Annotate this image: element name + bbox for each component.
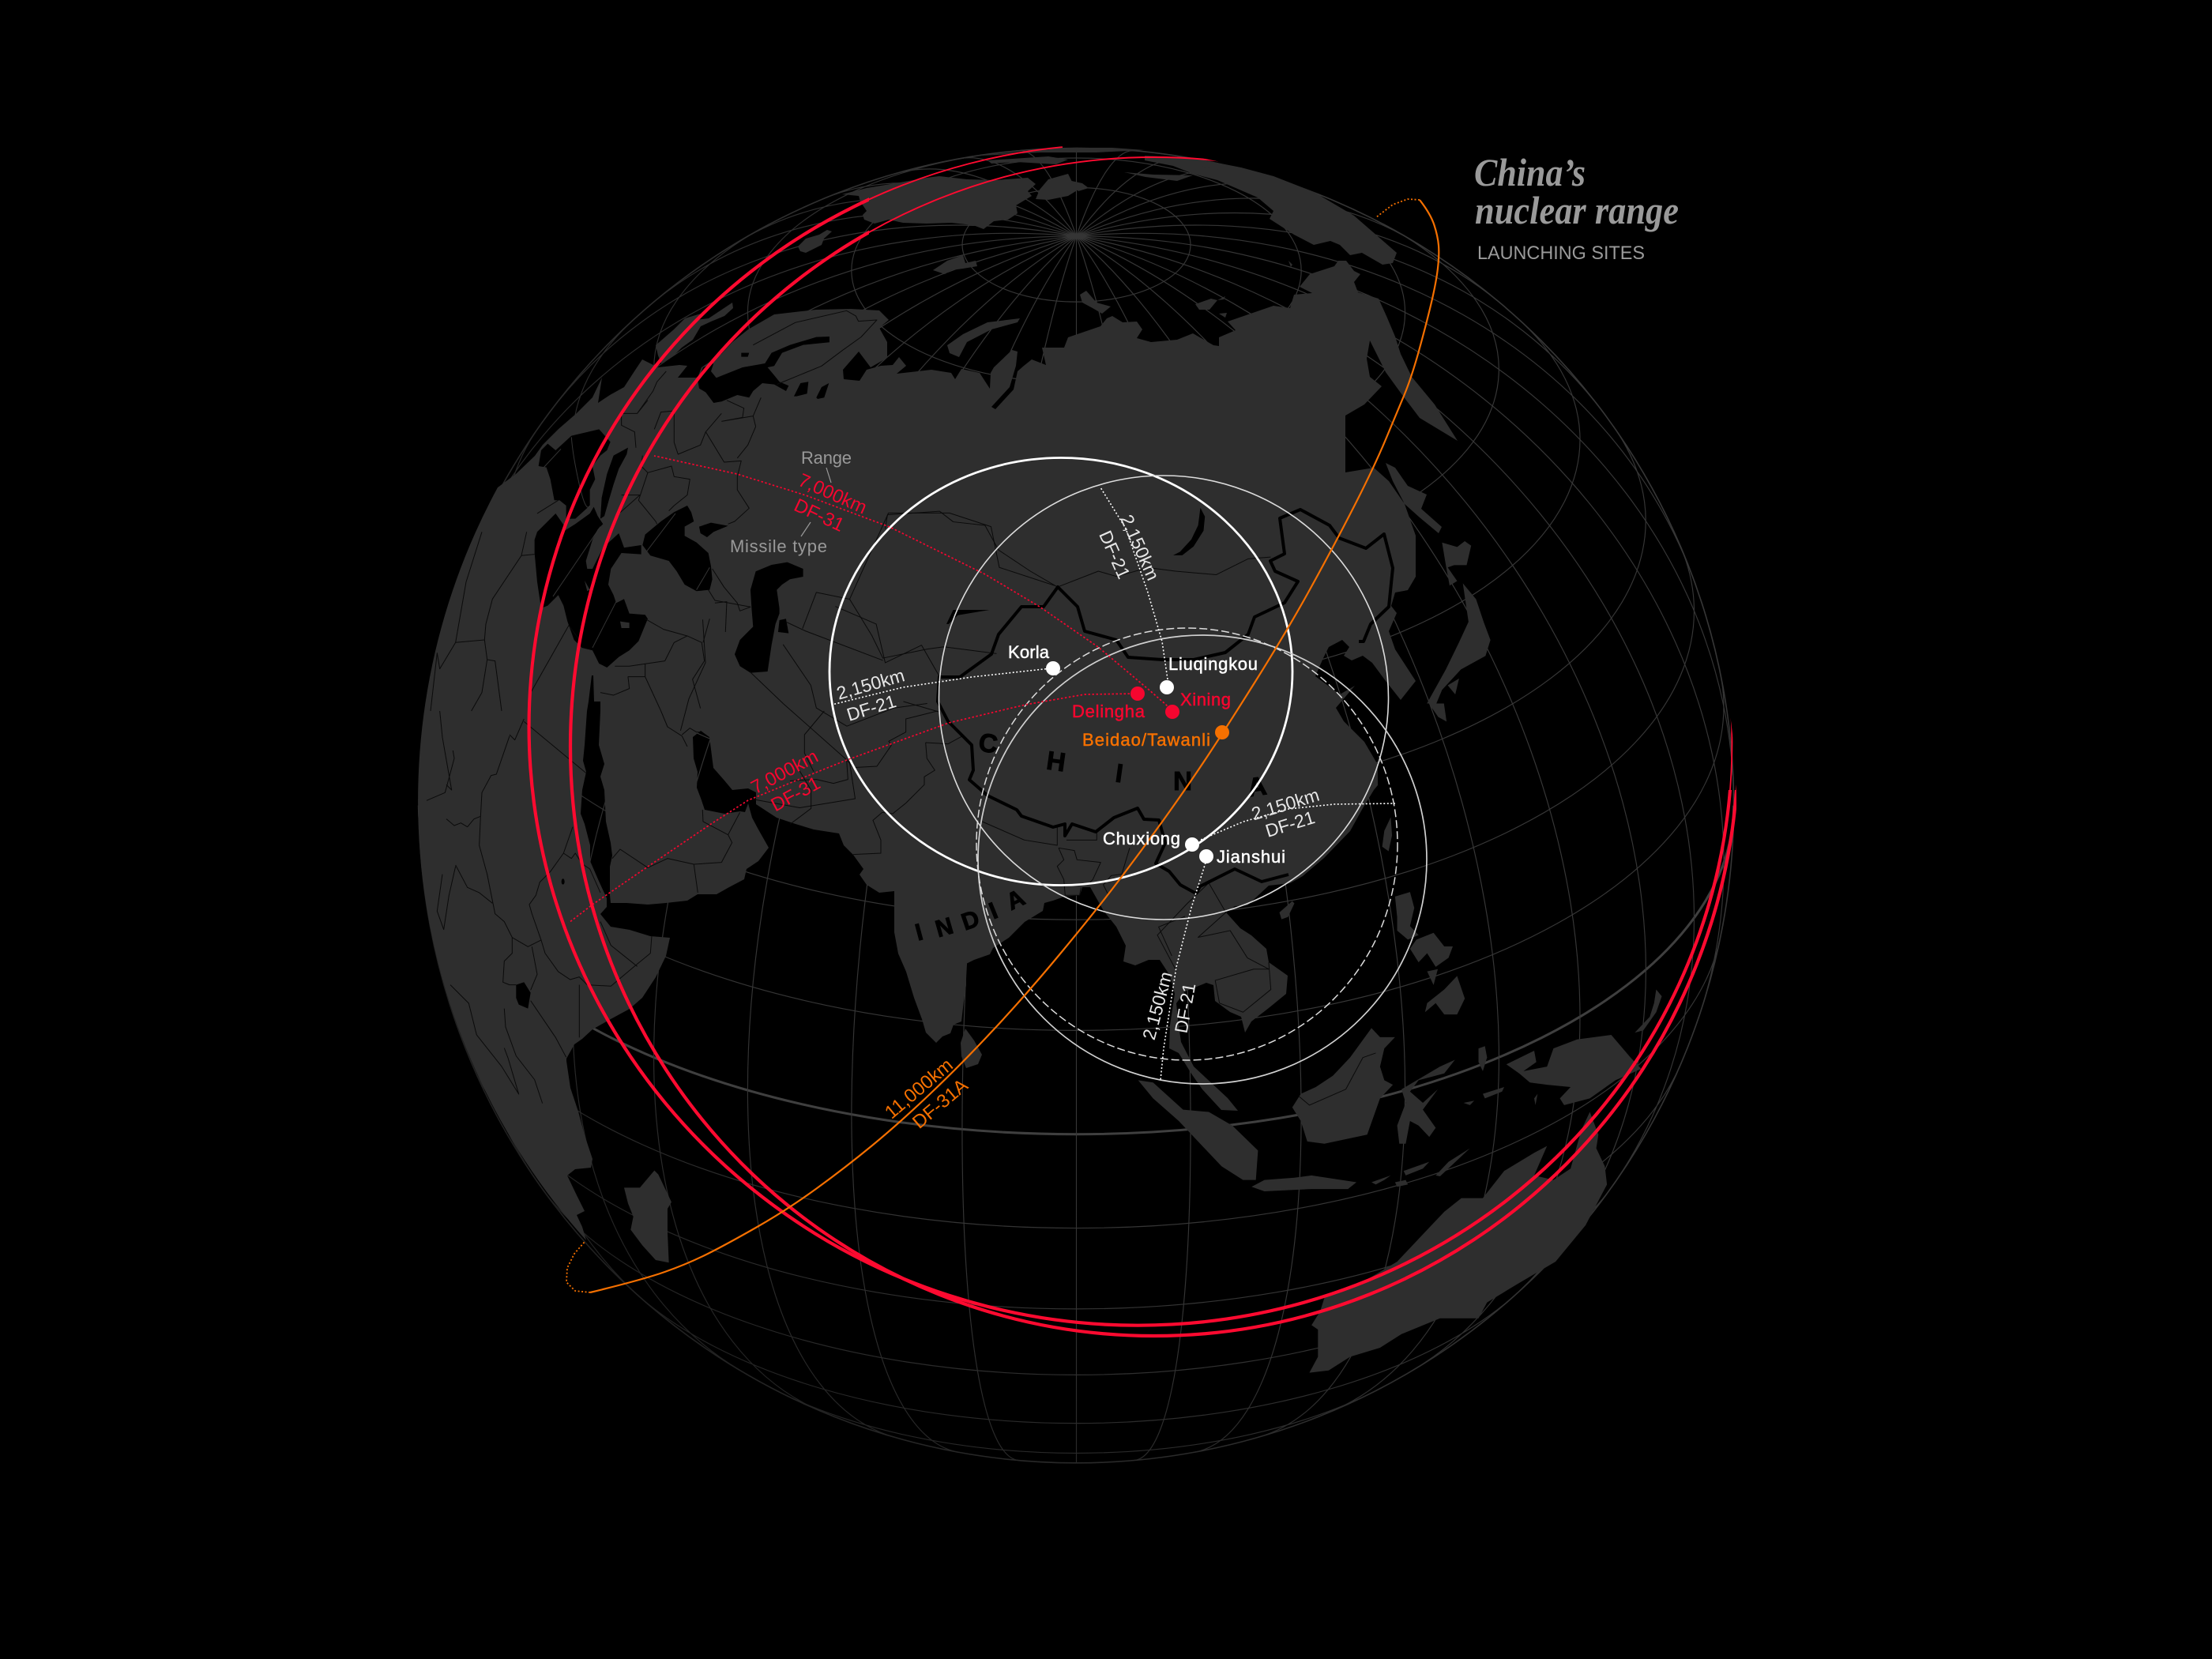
- launch site marker: Liuqingkou: [1160, 680, 1174, 694]
- land: Sri Lanka: [961, 1029, 982, 1068]
- land: Alaska and western Canada: [1145, 156, 1397, 265]
- land: Sakhalin: [1386, 463, 1442, 533]
- country label: CHINA: [977, 728, 1268, 802]
- range labels: Xining DF-31: 7,000km: [795, 469, 870, 519]
- country label: INDIA: N: [932, 913, 956, 942]
- range labels: Beidao DF-31A: 11,000km: [881, 1055, 957, 1123]
- annotation: Missile type: Missile type: [730, 536, 827, 556]
- range labels: Jianshui: 2,150km: [1138, 969, 1176, 1042]
- range labels: Korla: DF-21: [845, 690, 898, 725]
- site label: Jianshui: Jianshui: [1217, 847, 1285, 867]
- annotation: Missile type: [730, 522, 827, 556]
- country label: CHINA: H: [1045, 746, 1067, 777]
- range line: Chuxiong: [1201, 803, 1395, 840]
- country label: CHINA: A: [1246, 771, 1268, 802]
- small Mediterranean islands: [585, 581, 630, 628]
- site label: Xining: Xining: [1180, 690, 1231, 709]
- range arc: Beidao DF-31A: [566, 199, 1439, 1292]
- range labels: Beidao DF-31A: DF-31A: [908, 1074, 972, 1133]
- range ring: Delingha DF-31 great ellipse: [570, 157, 1738, 1336]
- launch site marker: Xining: [1165, 705, 1179, 719]
- water: Baltic Sea and lakes: [698, 337, 830, 403]
- range labels: Liuqingkou: DF-21: [1095, 528, 1134, 581]
- launch site marker: Korla: [1046, 661, 1060, 675]
- range line: Liuqingkou: [1100, 487, 1168, 679]
- land: Great Britain and Ireland: [656, 303, 733, 363]
- range labels: Korla: 2,150km: [834, 664, 907, 704]
- water: Mediterranean, Black Sea and Caspian: [535, 429, 803, 673]
- land: Southeast Asian islands, New Guinea and Australia: [1138, 817, 1662, 1373]
- water: African lakes: [516, 878, 565, 1009]
- range ring: Korla DF-21: [830, 458, 1292, 885]
- range labels: Jianshui: DF-21: [1171, 981, 1199, 1035]
- launch site marker: Delingha: [1130, 687, 1145, 701]
- range labels: Xining DF-31: [791, 469, 870, 536]
- range labels: Liuqingkou: 2,150km: [1116, 511, 1164, 584]
- range labels: Chuxiong: DF-21: [1263, 807, 1317, 841]
- country label: CHINA: C: [977, 728, 999, 758]
- site label: Chuxiong: Chuxiong: [1103, 829, 1180, 848]
- title: China’s: [1474, 150, 1586, 194]
- inland seas and lakes: [516, 337, 1205, 1009]
- launch site marker: Beidao/Tawanli: [1215, 725, 1229, 739]
- country label: INDIA: D: [958, 905, 983, 936]
- range labels: Delingha DF-31: DF-31: [767, 773, 824, 816]
- range labels: Liuqingkou: [1095, 511, 1164, 584]
- title: nuclear range: [1475, 188, 1679, 232]
- range labels: Jianshui: [1138, 969, 1199, 1042]
- China border: [938, 510, 1393, 893]
- range line: Korla: [832, 668, 1053, 705]
- range ring: Xining DF-31 great ellipse: [528, 146, 1733, 1327]
- country borders: [427, 310, 1375, 1105]
- globe graticule: [419, 148, 1734, 1463]
- launch site marker: Jianshui: [1199, 849, 1213, 863]
- land: Arctic islands: [798, 148, 1292, 357]
- range ring: Chuxiong DF-21 dashed: [976, 628, 1398, 1060]
- land: Eurasia and Africa: [418, 261, 1458, 1240]
- range line: Delingha DF-31: [569, 694, 1138, 923]
- range ring: Jianshui DF-21: [978, 635, 1427, 1084]
- range labels: Xining DF-31: DF-31: [791, 495, 848, 536]
- annotation: Range: [801, 448, 852, 483]
- country label: INDIA: [912, 885, 1029, 946]
- land: Madagascar: [624, 1171, 672, 1262]
- launch site marker: Chuxiong: [1185, 837, 1199, 852]
- range labels: Chuxiong: 2,150km: [1249, 784, 1322, 824]
- country label: INDIA: A: [1003, 885, 1029, 916]
- site label: Beidao/Tawanli: Beidao/Tawanli: [1082, 730, 1210, 750]
- land: Japan: [1427, 541, 1491, 721]
- site label: Delingha: Delingha: [1072, 702, 1146, 721]
- country label: CHINA: N: [1173, 766, 1192, 796]
- range labels: Delingha DF-31: 7,000km: [747, 746, 822, 799]
- subtitle: LAUNCHING SITES: [1477, 243, 1645, 264]
- range labels: Korla: [834, 664, 907, 725]
- water: Lake Baikal and Lake Balkhash: [946, 508, 1205, 624]
- land masses: [418, 148, 1662, 1373]
- range line: Xining DF-31: [654, 456, 1172, 712]
- range line: Jianshui: [1161, 863, 1206, 1080]
- site label: Liuqingkou: Liuqingkou: [1168, 654, 1258, 674]
- range ring: Liuqingkou DF-21: [939, 476, 1389, 920]
- graticule traces across inland seas: [544, 437, 709, 648]
- land: Greenland: [842, 176, 1036, 229]
- annotation: Range: Range: [801, 448, 852, 468]
- country label: INDIA: I: [912, 919, 926, 946]
- site label: Korla: Korla: [1008, 642, 1050, 662]
- title: [1474, 150, 1679, 232]
- country label: INDIA: I: [986, 898, 1002, 924]
- country label: CHINA: I: [1114, 758, 1125, 788]
